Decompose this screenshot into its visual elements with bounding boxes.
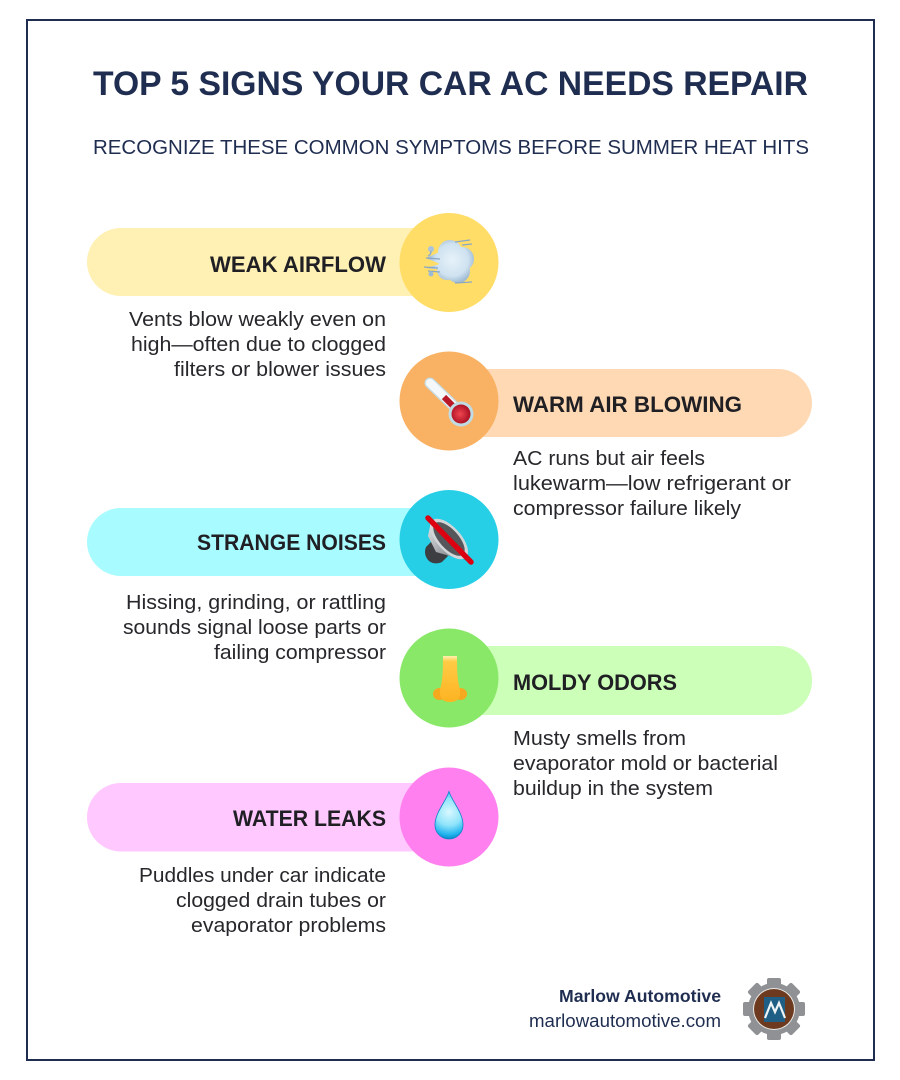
moldy odors heading: MOLDY ODORS [513,670,677,695]
strange noises description [123,591,386,664]
warm air description [513,447,791,520]
icon: wind cloud [424,240,474,283]
strange noises description: failing compressor [214,641,386,664]
subtitle: RECOGNIZE THESE COMMON SYMPTOMS BEFORE SUMMER HEAT HITS [93,136,809,159]
panel: moldy odors [400,628,812,800]
water leaks description: evaporator problems [191,914,386,937]
weak airflow circle [400,213,498,312]
footer company name: Marlow Automotive [559,986,721,1006]
weak airflow pill [87,228,449,296]
weak airflow description: filters or blower issues [174,358,386,381]
water leaks heading: WATER LEAKS [233,806,386,831]
moldy odors description: buildup in the system [513,777,713,800]
warm air pill [449,369,812,437]
moldy odors description: evaporator mold or bacterial [513,752,778,775]
strange noises description: Hissing, grinding, or rattling [126,591,386,614]
weak airflow description [129,308,386,381]
warm air heading: WARM AIR BLOWING [513,392,742,417]
warm air description: lukewarm—low refrigerant or [513,472,791,495]
title: TOP 5 SIGNS YOUR CAR AC NEEDS REPAIR [93,65,808,103]
warm air circle [400,352,498,450]
water leaks circle [400,768,498,866]
panel: strange noises [87,490,498,664]
panel: warm air blowing [400,352,812,520]
moldy odors description [513,727,778,800]
water leaks description: Puddles under car indicate [139,864,386,887]
weak airflow heading: WEAK AIRFLOW [210,252,386,277]
strange noises circle [400,490,498,589]
weak airflow description: Vents blow weakly even on [129,308,386,331]
icon: muted speaker [423,512,475,566]
panel: weak airflow [87,213,498,381]
moldy odors circle [400,628,498,728]
warm air description: AC runs but air feels [513,447,705,470]
icon: nose [433,656,467,702]
icon: company logo gear [743,978,805,1040]
water leaks description: clogged drain tubes or [176,889,386,912]
weak airflow description: high—often due to clogged [131,333,386,356]
water leaks description [139,864,386,937]
water leaks pill [87,783,449,852]
moldy odors description: Musty smells from [513,727,686,750]
icon: water drop [435,792,463,839]
strange noises description: sounds signal loose parts or [123,616,386,639]
strange noises pill [87,508,449,576]
icon: thermometer [430,383,474,426]
warm air description: compressor failure likely [513,497,742,520]
strange noises heading: STRANGE NOISES [197,530,386,555]
panel: water leaks [87,768,498,937]
moldy odors pill [449,646,812,715]
footer website: marlowautomotive.com [529,1011,721,1031]
